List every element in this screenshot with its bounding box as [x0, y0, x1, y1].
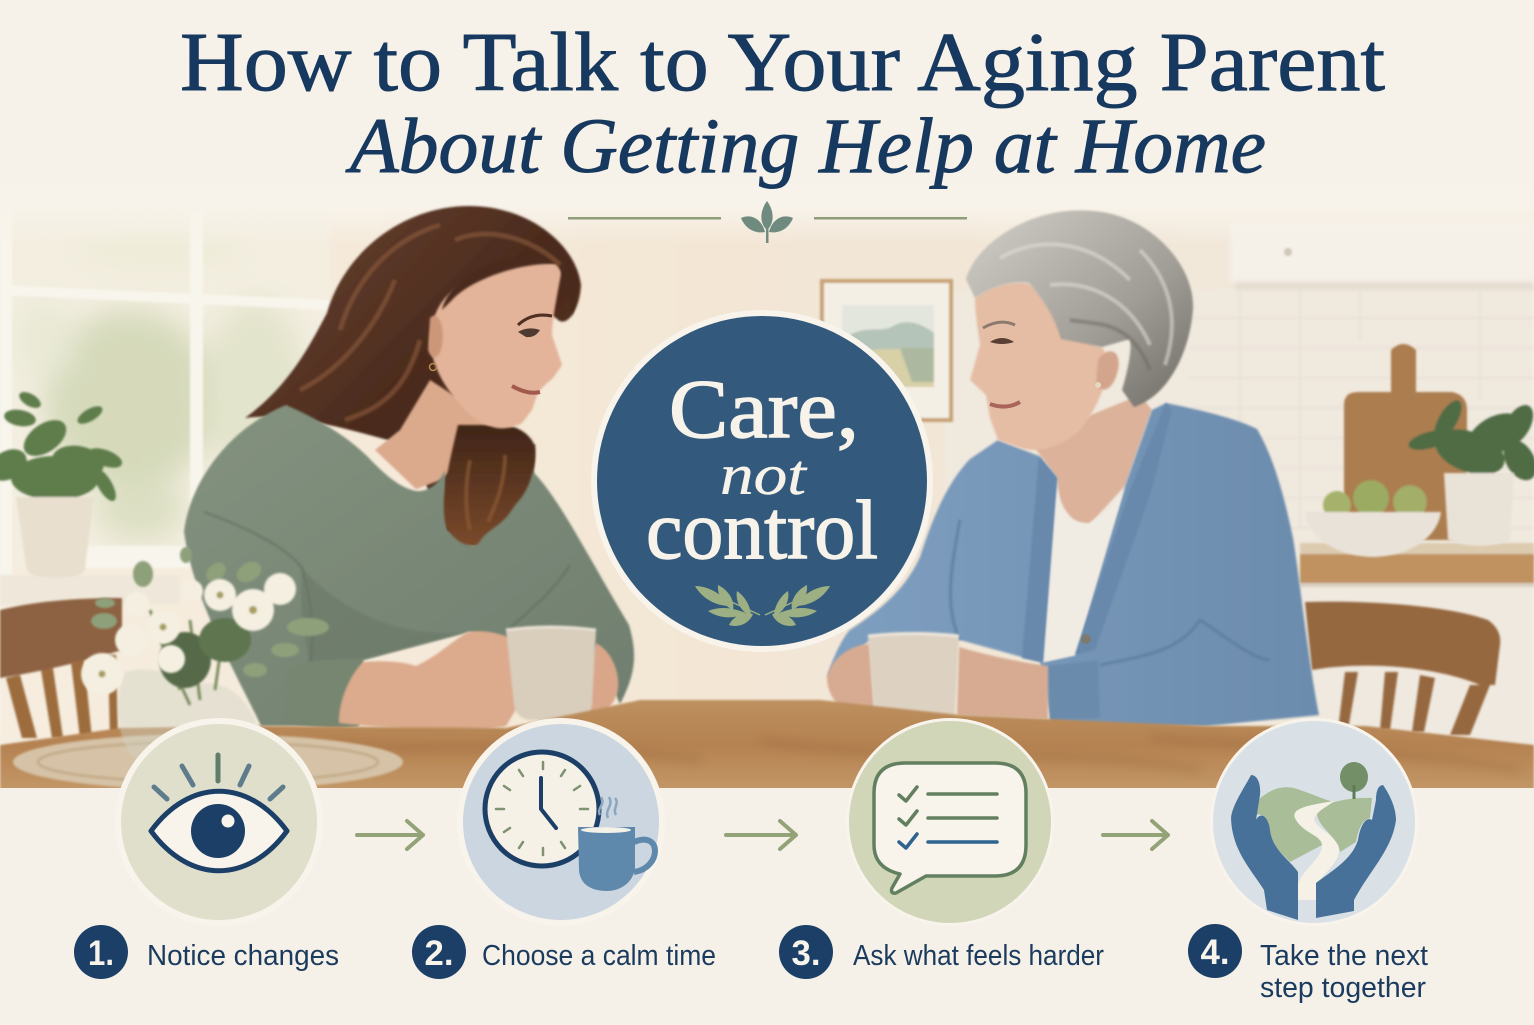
wooden chair left	[0, 598, 122, 738]
neck	[1029, 395, 1152, 525]
framed picture	[820, 279, 953, 422]
fade at top of photo	[0, 185, 1534, 245]
step 1 label: 1.	[88, 934, 114, 973]
woman's ear	[428, 316, 443, 357]
blossoms	[81, 573, 296, 695]
step 3 label	[779, 925, 1104, 979]
step 3 icon: speech bubble checklist	[846, 718, 1054, 926]
window foliage	[28, 302, 302, 545]
title	[180, 16, 1385, 189]
step 4 icon: hands holding path	[1210, 718, 1418, 926]
fruit bowl	[1305, 480, 1441, 557]
woman's face	[430, 262, 563, 428]
arrow 3	[1103, 821, 1168, 849]
woman's neck	[375, 380, 500, 489]
woven placemat	[13, 734, 403, 790]
step 4 label	[1188, 924, 1428, 1004]
button	[1081, 634, 1091, 644]
step 1 icon: eye	[115, 718, 323, 926]
kitchen photo scene	[0, 222, 1534, 744]
divider with leaf ornament	[568, 201, 967, 243]
eye and mouth	[983, 322, 1015, 328]
face	[970, 283, 1107, 450]
laurel sprig	[695, 585, 830, 626]
step 4 label: step together	[1260, 972, 1426, 1004]
badge text: control	[646, 484, 878, 577]
winding road	[1294, 801, 1339, 900]
badge text: Care,	[669, 363, 859, 456]
step 3 label: 3.	[792, 934, 820, 973]
woman's earring	[430, 364, 436, 370]
cardigan rib bands	[1022, 403, 1172, 662]
room background	[2, 222, 1534, 744]
cardigan sleeve fold	[951, 520, 1270, 665]
cabinet knob	[1284, 248, 1292, 256]
step 1 label	[74, 925, 339, 979]
glass vase	[118, 669, 256, 758]
arrow 1	[357, 821, 423, 849]
left hand	[1231, 775, 1298, 920]
earring	[1095, 382, 1101, 388]
woman's sleeve cuff	[300, 660, 364, 728]
hair strands	[1000, 244, 1172, 365]
step 4 label: Take the next	[1260, 940, 1428, 972]
right hand	[1316, 785, 1396, 918]
flower vase	[81, 547, 329, 758]
step 2 icon: clock and mug	[457, 718, 665, 926]
woman's temple hair	[442, 257, 576, 316]
near hand	[957, 647, 1048, 719]
potted plant left	[0, 389, 125, 578]
step 4 label: 4.	[1200, 933, 1230, 972]
tree	[1340, 762, 1368, 792]
woman's front hair	[444, 424, 534, 545]
window frame	[1, 227, 330, 574]
step 2 label	[412, 925, 716, 979]
woman's sweater shading	[204, 512, 570, 626]
far hand	[827, 644, 875, 719]
cutting board and counter	[1300, 344, 1534, 587]
badge text	[646, 363, 878, 577]
central badge: Care, not control	[591, 310, 933, 652]
woman's sweater	[184, 405, 634, 726]
potted plant right	[1407, 396, 1534, 546]
ear	[1096, 351, 1119, 390]
tile lines	[1190, 290, 1534, 530]
woman in green sweater	[184, 206, 634, 730]
grey hair	[966, 210, 1193, 407]
stems and leaves	[91, 547, 329, 705]
wooden chair right	[1305, 602, 1500, 735]
bottom band	[0, 788, 1534, 1025]
woman's hair back	[245, 206, 581, 546]
woman's mug	[506, 626, 596, 720]
woman's arm and hand	[339, 631, 524, 730]
woman's eye and mouth	[518, 315, 552, 325]
title line 1: How to Talk to Your Aging Parent	[180, 16, 1385, 109]
badge text: not	[720, 444, 807, 507]
step 1 label: Notice changes	[147, 940, 339, 972]
step 2 label: Choose a calm time	[482, 940, 716, 972]
cardigan	[827, 403, 1319, 726]
step 2 label: 2.	[424, 934, 454, 973]
wooden table	[0, 700, 1534, 790]
woman's hair highlights	[300, 225, 560, 420]
white shirt	[1043, 486, 1125, 662]
cardigan cuff	[1048, 660, 1100, 720]
older woman in blue cardigan	[827, 210, 1319, 730]
mug	[868, 633, 959, 730]
woman's far hand	[590, 642, 620, 712]
hills	[1256, 787, 1334, 862]
step 3 label: Ask what feels harder	[853, 940, 1104, 972]
title line 2: About Getting Help at Home	[345, 102, 1266, 189]
arrow 2	[726, 821, 796, 849]
